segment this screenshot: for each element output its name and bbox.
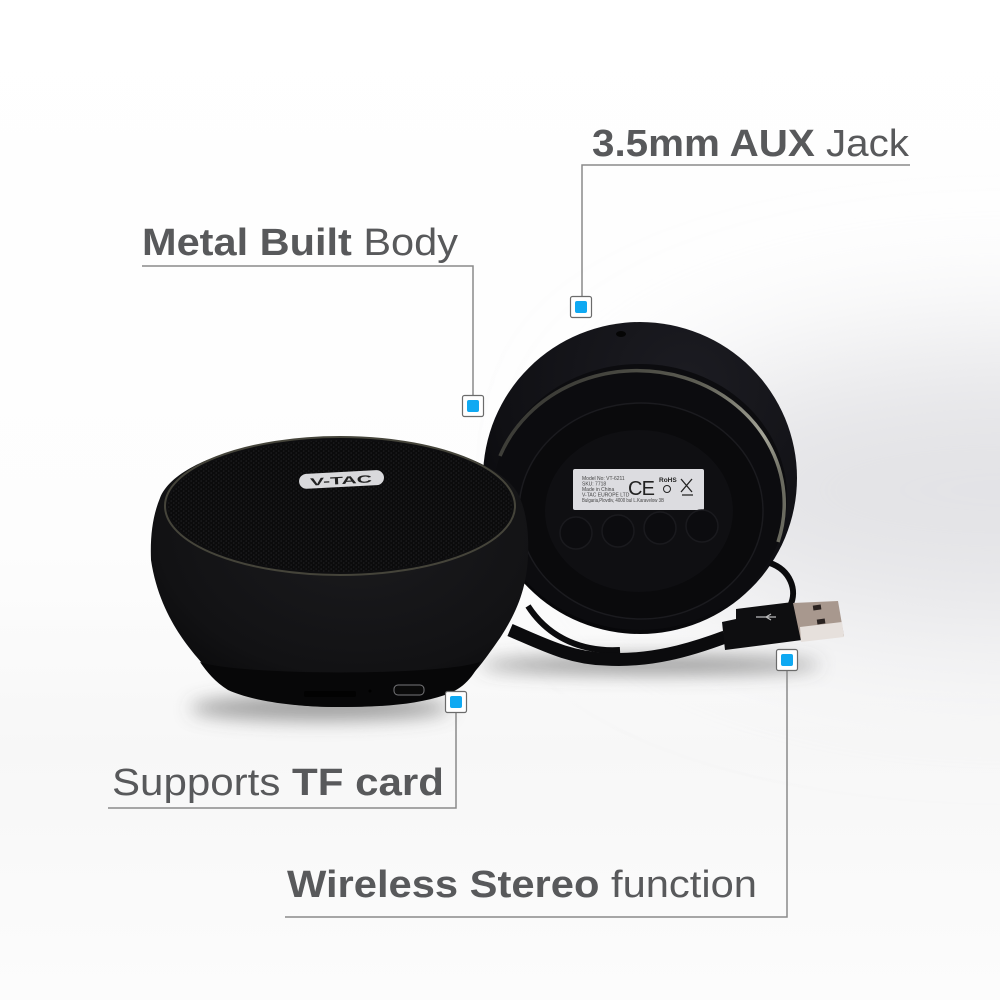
callout: 3.5mm AUX Jack — [570, 123, 910, 318]
rear speaker shell — [483, 322, 797, 634]
rating label: Made in China — [582, 487, 614, 493]
marker — [570, 296, 592, 318]
floor shadow — [190, 656, 820, 721]
callout: Supports TF card — [108, 692, 466, 808]
callout: Metal Built Body — [142, 222, 484, 416]
indicator hole — [368, 690, 372, 692]
callout: Wireless Stereo function — [285, 650, 798, 917]
USB connector — [793, 601, 844, 641]
base plate — [519, 403, 763, 619]
micro USB port — [394, 685, 424, 695]
inner recess — [493, 364, 787, 630]
rating label — [573, 469, 704, 510]
V-TAC badge: V-TAC — [310, 473, 373, 489]
inner disc — [545, 430, 733, 592]
rating label: Model No: VT-6211 — [582, 476, 625, 482]
callout: Supports TF card: Supports TF card — [112, 762, 444, 804]
rating label: RoHS — [659, 477, 677, 484]
callout: Wireless Stereo function: Wireless Stereo function — [287, 864, 757, 906]
front speaker body — [151, 437, 528, 707]
control buttons — [560, 510, 718, 549]
USB logo — [756, 614, 776, 620]
rating label: CE — [628, 478, 655, 500]
USB cable — [510, 563, 844, 659]
USB plug housing — [722, 602, 802, 650]
speaker grille — [168, 440, 512, 572]
marker — [462, 396, 484, 416]
marker — [446, 692, 466, 712]
rating label: V-TAC EUROPE LTD — [582, 492, 630, 498]
marker — [776, 650, 798, 670]
rear speaker — [483, 322, 797, 634]
TF card slot — [304, 691, 356, 697]
top rim — [165, 437, 515, 575]
microphone hole — [616, 331, 626, 337]
V-TAC badge — [299, 470, 384, 489]
rating label: Bulgaria,Plovdiv, 4000 bul L.Karavelow 3B — [582, 498, 665, 504]
front speaker — [151, 437, 528, 707]
base ring — [200, 662, 480, 707]
callout: 3.5mm AUX Jack: 3.5mm AUX Jack — [592, 123, 910, 165]
metal ring — [500, 371, 784, 542]
rating label: SKU: 7718 — [582, 482, 606, 488]
callout: Metal Built Body: Metal Built Body — [142, 222, 458, 264]
